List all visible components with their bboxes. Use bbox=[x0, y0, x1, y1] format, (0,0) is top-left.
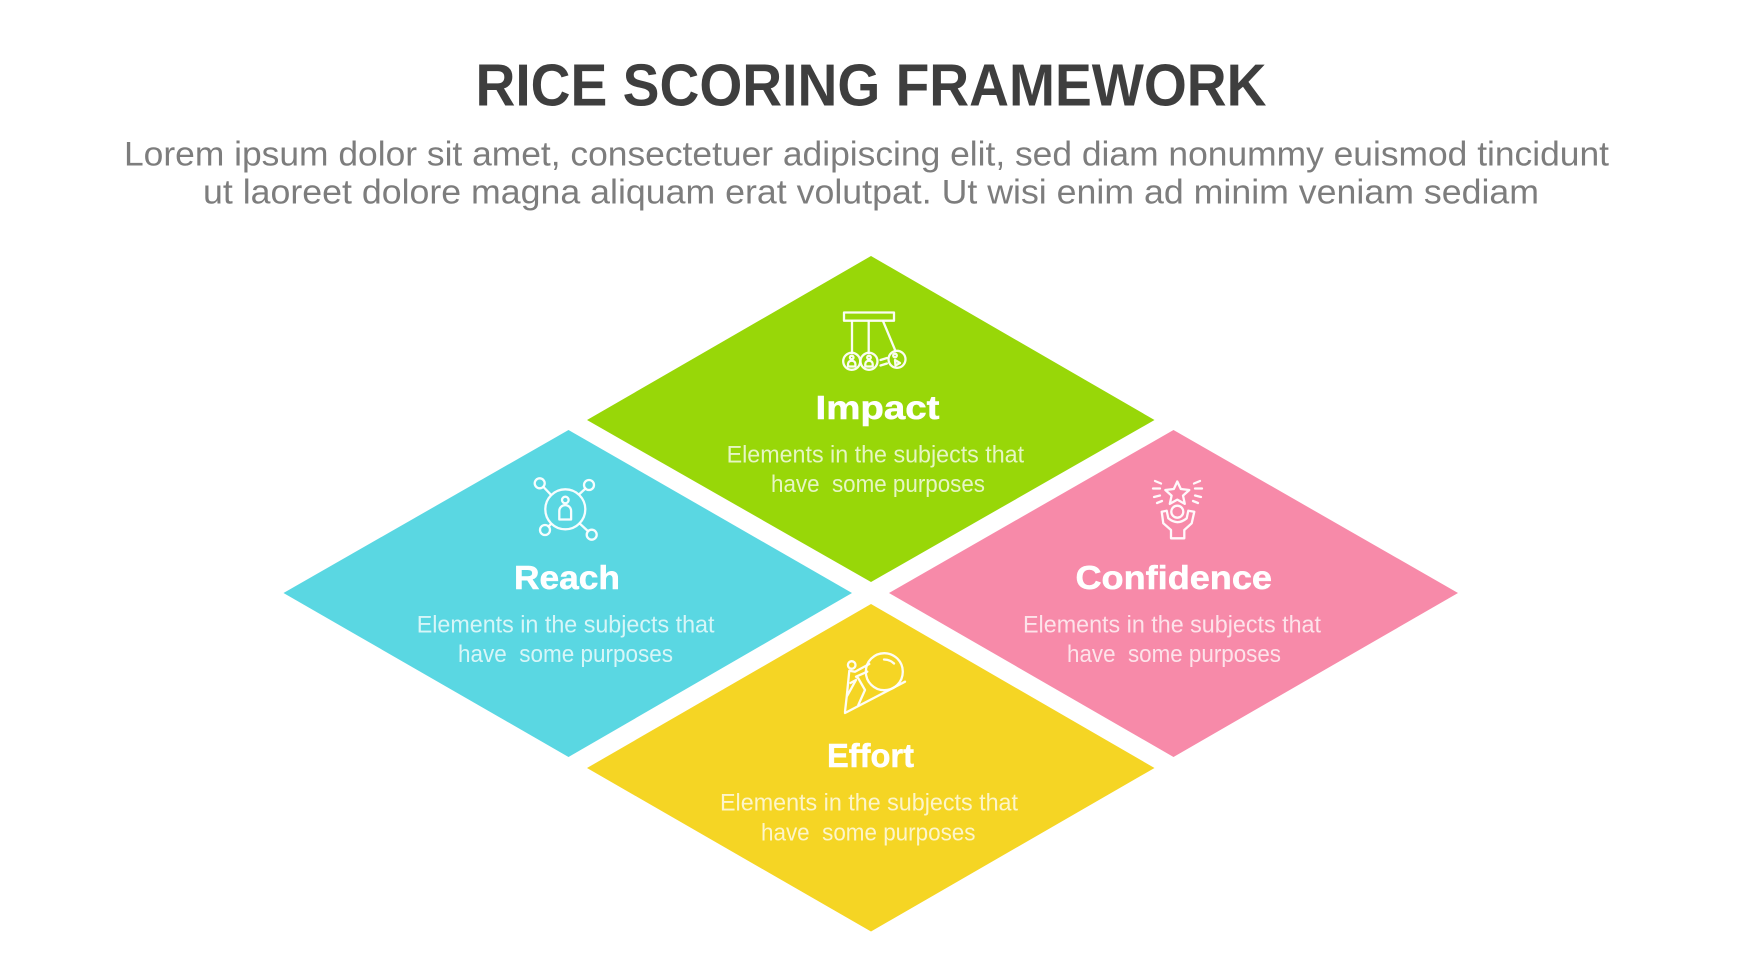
reach description: have some purposes bbox=[458, 641, 673, 668]
impact description: have some purposes bbox=[771, 471, 985, 498]
impact heading: Impact bbox=[816, 389, 940, 426]
effort heading: Effort bbox=[827, 737, 914, 774]
reach description: Elements in the subjects that bbox=[417, 612, 715, 639]
panel: reach bbox=[284, 430, 852, 757]
impact description: Elements in the subjects that bbox=[727, 442, 1024, 469]
icon: newton's cradle bbox=[843, 312, 906, 370]
reach diamond bbox=[284, 430, 852, 757]
confidence diamond bbox=[889, 430, 1458, 757]
reach description bbox=[417, 612, 715, 668]
icon: network person bbox=[535, 478, 597, 540]
panel: effort bbox=[587, 604, 1154, 932]
effort description: Elements in the subjects that bbox=[720, 790, 1018, 817]
panel: impact bbox=[587, 256, 1154, 582]
impact description bbox=[727, 442, 1024, 498]
icon: hands holding star bbox=[1153, 481, 1202, 538]
title: RICE SCORING FRAMEWORK bbox=[476, 52, 1267, 118]
icon: person pushing boulder uphill bbox=[845, 653, 905, 713]
confidence description: have some purposes bbox=[1067, 641, 1281, 668]
effort description bbox=[720, 790, 1018, 847]
confidence heading: Confidence bbox=[1076, 559, 1272, 596]
subtitle text block bbox=[124, 136, 1610, 212]
panel: confidence bbox=[889, 430, 1458, 757]
effort description: have some purposes bbox=[761, 820, 976, 847]
reach heading: Reach bbox=[514, 559, 620, 596]
impact diamond bbox=[587, 256, 1154, 582]
subtitle text block: ut laoreet dolore magna aliquam erat volutpat. Ut wisi enim ad minim veniam sediam bbox=[203, 174, 1539, 212]
confidence description: Elements in the subjects that bbox=[1023, 612, 1321, 639]
subtitle text block: Lorem ipsum dolor sit amet, consectetuer adipiscing elit, sed diam nonummy euismod tincidunt bbox=[124, 136, 1610, 174]
effort diamond bbox=[587, 604, 1154, 932]
confidence description bbox=[1023, 612, 1321, 668]
